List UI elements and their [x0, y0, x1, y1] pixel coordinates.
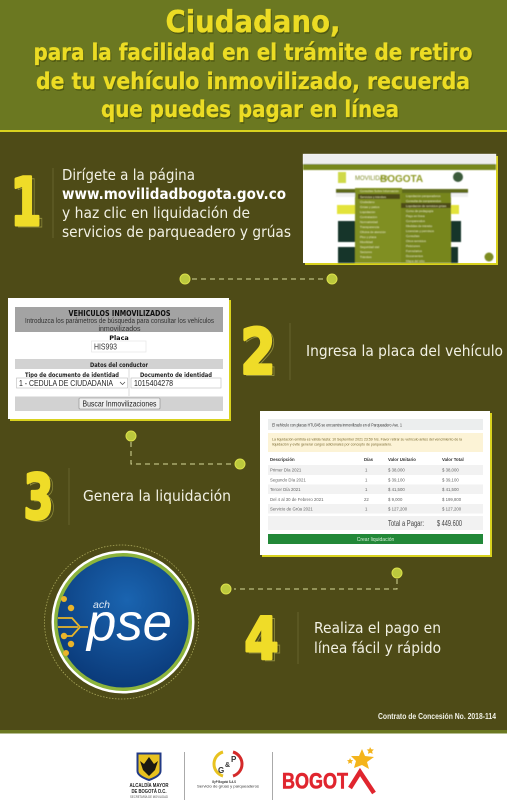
connector 3 to 4 — [221, 568, 402, 594]
footer — [0, 730, 507, 810]
step 2 divider — [289, 323, 291, 380]
panel: website screenshot: BOGOTA — [380, 174, 423, 185]
panel: website screenshot: Consulta de comparendos — [406, 199, 442, 203]
panel: vehicle form: HIS993 — [94, 342, 117, 352]
panel: settlement table: $ 38,000 — [442, 468, 459, 472]
Alcaldía label: SECRETARÍA DE MOVILIDAD — [130, 795, 169, 799]
panel: settlement table: Días — [364, 457, 374, 462]
panel: settlement table: Descripción — [270, 457, 295, 462]
step 1 text: Dirígete a la página — [62, 166, 195, 184]
panel: settlement table: $ 39,100 — [442, 478, 459, 482]
step 1 number: 1 — [13, 166, 45, 243]
panel: settlement table: $ 449.600 — [437, 519, 462, 528]
header band — [0, 0, 507, 132]
icon: PSE logo: ach — [93, 600, 110, 611]
panel: website screenshot: Pico y placa — [360, 235, 377, 239]
panel: website screenshot: Transparencia — [360, 225, 379, 229]
panel: settlement table: Valor Unitario — [388, 457, 416, 462]
G&P label: GyP Bogotá S.A.S — [212, 779, 236, 784]
panel: settlement table: $ 41,500 — [388, 487, 405, 492]
panel: website screenshot: Comparendos — [406, 219, 425, 223]
panel: website screenshot: Servicios y trámites — [360, 195, 387, 199]
panel: website screenshot — [303, 154, 498, 265]
panel: website screenshot: Normatividad — [360, 220, 378, 224]
step 2 number: 2 — [240, 316, 276, 388]
panel: website screenshot: MOVILIDAD — [355, 176, 389, 182]
panel: website screenshot: Ciudadano — [360, 200, 375, 204]
panel: website screenshot: Sectores — [360, 250, 372, 254]
panel: website screenshot: Movilidad — [360, 240, 373, 244]
step 4 text — [314, 619, 441, 657]
step 4 number: 4 — [247, 606, 282, 674]
icon: G&P logo: P — [231, 755, 237, 764]
panel: settlement table: $ 38,000 — [388, 468, 405, 472]
step 2 number: 2 — [242, 318, 278, 390]
panel: vehicle form: 1 - CEDULA DE CIUDADANIA — [19, 379, 114, 388]
panel: settlement table: Valor Total — [442, 457, 464, 462]
panel: settlement table: $ 127,200 — [442, 506, 462, 512]
panel: website screenshot: Consultas — [406, 234, 420, 238]
panel: website screenshot: Grúas y patios — [360, 205, 380, 209]
title — [34, 5, 474, 124]
panel: settlement table: 1 — [365, 468, 368, 472]
icon: G&P logo: G — [218, 766, 224, 775]
panel: settlement table: $ 9,000 — [388, 497, 403, 502]
panel: website screenshot: Medidas de tránsito — [406, 224, 433, 228]
panel: vehicle form: Datos del conductor — [90, 361, 149, 369]
panel: website screenshot: Contratación — [360, 215, 377, 219]
panel: vehicle form: Introduzca los parámetros de búsqueda para consultar los vehículos — [25, 318, 214, 325]
Alcaldía label: DE BOGOTÁ D.C. — [132, 788, 167, 795]
step 1 text — [62, 166, 291, 241]
panel: website screenshot: Seguridad vial — [360, 245, 379, 249]
panel: settlement table: $ 39,100 — [388, 478, 405, 482]
panel: settlement table: 1 — [365, 478, 368, 482]
icon: G&P logo — [214, 752, 242, 776]
panel: settlement table: $ 127,200 — [388, 506, 408, 512]
panel: vehicle form: 1015404278 — [134, 379, 173, 388]
title: Ciudadano, — [166, 6, 342, 42]
connector 1 to 2 — [180, 274, 337, 284]
panel: vehicle form: VEHICULOS INMOVILIZADOS — [68, 309, 170, 318]
panel: vehicle form: Tipo de documento de identidad — [25, 371, 119, 379]
panel: settlement table: El vehículo con placas HTU345 se encuentra inmovilizado en el Parqueadero Ave. 1 — [272, 422, 402, 428]
panel: settlement table: Tercer Día 2021 — [270, 487, 301, 492]
title: que puedes pagar en línea — [102, 98, 400, 124]
panel: settlement table: $ 41,500 — [442, 487, 459, 492]
step 3 number: 3 — [26, 462, 57, 536]
panel: website screenshot: Trámites — [360, 255, 372, 259]
panel: website screenshot: Peticiones — [406, 244, 420, 248]
icon: PSE logo: pse — [85, 594, 172, 652]
step 4 divider — [297, 612, 299, 664]
step 1 divider — [52, 168, 54, 238]
Alcaldía label: ALCALDÍA MAYOR — [130, 781, 169, 789]
panel: website screenshot: Liquidación de servicios grúas — [406, 204, 447, 208]
panel: settlement table: Total a Pagar: — [388, 519, 424, 528]
panel: vehicle form — [8, 298, 231, 421]
step 3 number: 3 — [24, 460, 54, 534]
icon: PSE logo — [44, 545, 198, 699]
icon: Bogotá coat of arms — [138, 754, 160, 780]
panel: settlement table: 1 — [365, 506, 368, 512]
icon: G&P logo: & — [225, 762, 230, 769]
panel: settlement table: Primer Día 2021 — [270, 468, 302, 472]
step 1 text: www.movilidadbogota.gov.co — [62, 185, 286, 203]
panel: settlement table: La liquidación emitida es válida hasta: 10 September 2021 23:59 hrs. Favor retirar su vehículo antes del vencimiento de la — [272, 436, 463, 442]
panel: website screenshot: Consultas Sobre Información — [360, 189, 399, 193]
panel: settlement table: Del 4 al 30 de Febrero 2021 — [270, 497, 324, 502]
panel: vehicle form: inmovilizados — [98, 326, 141, 333]
connector 2 to 3 — [126, 431, 245, 469]
step 1 text: servicios de parqueadero y grúas — [62, 223, 291, 241]
panel: settlement table: $ 199,800 — [442, 497, 462, 502]
Alcaldía label — [130, 781, 169, 799]
panel: website screenshot: Liquidación parqueaderos — [406, 194, 441, 198]
step 4 text: Realiza el pago en — [314, 619, 441, 637]
panel: website screenshot: Otros servicios — [406, 239, 426, 243]
panel: website screenshot: Formularios — [406, 249, 422, 253]
panel: website screenshot: Documentos — [406, 254, 423, 258]
G&P label — [197, 779, 259, 788]
step 4 number: 4 — [244, 604, 278, 672]
panel: settlement table: Segundo Día 2021 — [270, 478, 306, 482]
panel: vehicle form: Placa — [109, 334, 129, 342]
step 3 text: Genera la liquidación — [83, 487, 231, 505]
step 3 divider — [68, 468, 70, 525]
panel: website screenshot: Liquidación — [360, 210, 376, 214]
panel: website screenshot: Oficina de atención — [360, 230, 386, 234]
step 1 number: 1 — [10, 164, 42, 241]
panel: settlement table: Crear liquidación — [357, 537, 394, 543]
panel: website screenshot: Mapa del sitio — [406, 259, 425, 263]
panel: website screenshot: Pago en línea — [406, 214, 425, 218]
logo: Bogotá: BOGOT — [282, 768, 348, 794]
G&P label: Servicio de grúas y parqueaderos — [197, 784, 259, 788]
step 4 text: línea fácil y rápido — [314, 639, 441, 657]
panel: vehicle form: Buscar Inmovilizaciones — [82, 398, 156, 408]
panel: vehicle form: Documento de identidad — [140, 371, 212, 379]
title: que puedes pagar en línea — [101, 97, 399, 123]
panel: settlement table: Servicio de Grúa 2021 — [270, 506, 313, 512]
step 1 text: y haz clic en liquidación de — [62, 204, 250, 222]
title: Ciudadano, — [166, 5, 340, 40]
logo: Bogotá — [282, 747, 374, 794]
panel: website screenshot: Curso de pedagogía — [406, 209, 434, 213]
panel: settlement table: 22 — [364, 497, 369, 502]
panel: settlement table — [260, 411, 492, 557]
panel: settlement table: liquidación y evite generar cargos adicionales por concepto de parqueadero. — [272, 442, 392, 446]
panel: settlement table: 1 — [365, 487, 368, 492]
panel: website screenshot: Licencias y permisos — [406, 229, 434, 233]
